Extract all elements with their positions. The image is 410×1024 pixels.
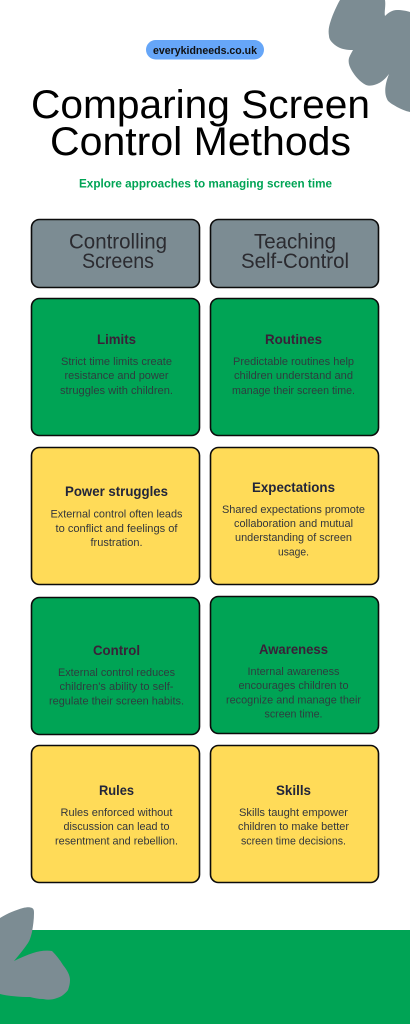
title: Control Methods (50, 120, 351, 164)
pill: website (146, 40, 264, 60)
card: expectations: Shared expectations promote (222, 504, 365, 516)
title (31, 83, 370, 164)
card: skills: Skills taught empower (239, 807, 348, 819)
card: skills (210, 746, 378, 882)
header: teaching self-control (210, 220, 378, 288)
card: limits (32, 298, 200, 436)
header: controlling screens (32, 220, 200, 288)
card: routines (210, 298, 378, 436)
card: skills: screen time decisions. (241, 836, 346, 848)
card: limits: Strict time limits create (61, 356, 172, 368)
card: limits: struggles with children. (60, 385, 173, 397)
card: power struggles: External control often leads (50, 508, 183, 520)
card: routines: Routines (265, 331, 322, 347)
card: power struggles: Power struggles (65, 483, 168, 499)
card: skills: children to make better (238, 821, 349, 833)
header: controlling screens: Screens (82, 250, 154, 273)
header: teaching self-control: Teaching (254, 230, 336, 254)
card: rules: Rules enforced without (60, 807, 172, 819)
card: routines: Predictable routines help (233, 356, 354, 368)
card: routines: manage their screen time. (232, 385, 355, 397)
decoration: bottom left blob (0, 907, 70, 1000)
card: control: Control (93, 642, 140, 658)
card: awareness: Internal awareness (248, 666, 340, 678)
card: awareness: screen time. (264, 708, 322, 720)
header: controlling screens: Controlling (69, 230, 167, 254)
card: power struggles (32, 448, 200, 584)
card: control: regulate their screen habits. (49, 696, 184, 708)
card: awareness (210, 596, 378, 734)
card: control (32, 598, 200, 734)
card: skills: Skills (276, 782, 311, 798)
card: rules: Rules (99, 782, 134, 798)
card: limits: Limits (97, 331, 136, 347)
card: limits: resistance and power (64, 370, 169, 382)
card: awareness: encourages children to (238, 680, 348, 692)
header: teaching self-control: Self-Control (241, 250, 349, 273)
decoration: top right blob (329, 0, 410, 112)
footer band (0, 930, 410, 1024)
card: rules (32, 746, 200, 882)
card: routines: children understand and (234, 370, 353, 382)
card: expectations: usage. (278, 546, 309, 558)
subtitle: Explore approaches to managing screen time (79, 176, 332, 190)
card: awareness: recognize and manage their (226, 694, 361, 706)
card: expectations: collaboration and mutual (234, 518, 353, 530)
pill: website: everykidneeds.co.uk (153, 45, 258, 57)
card: control: children's ability to self- (60, 681, 174, 693)
card: awareness: Awareness (259, 641, 328, 657)
title: Comparing Screen (31, 83, 370, 127)
card: control: External control reduces (58, 667, 175, 679)
card: rules: resentment and rebellion. (55, 836, 178, 848)
card: rules: discussion can lead to (64, 821, 170, 833)
card: expectations (210, 448, 378, 584)
card: power struggles: frustration. (90, 537, 142, 549)
card: power struggles: to conflict and feelings of (56, 523, 178, 535)
card: expectations: understanding of screen (235, 532, 352, 544)
card: expectations: Expectations (252, 479, 335, 495)
